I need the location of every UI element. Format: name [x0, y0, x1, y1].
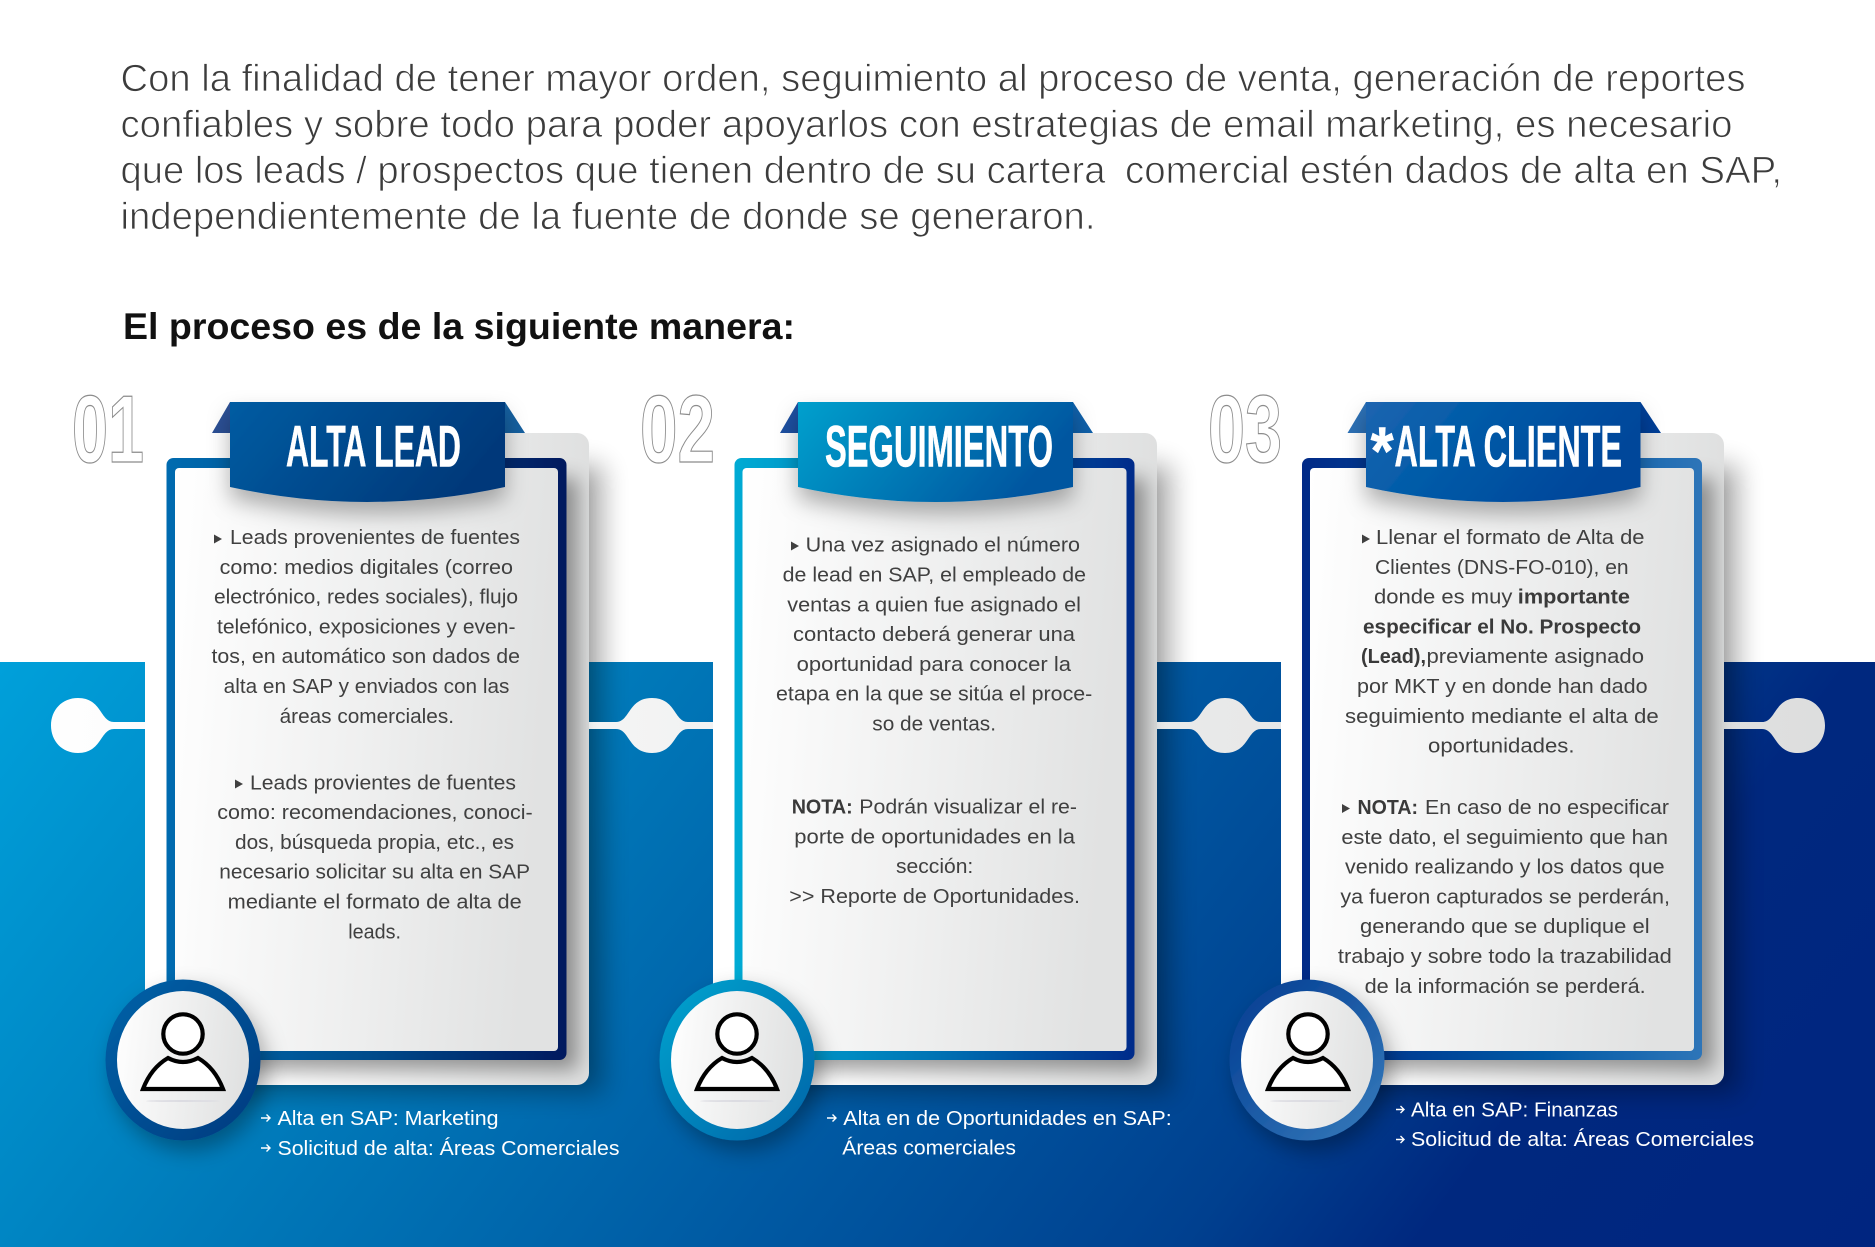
card 1 text: first paragraph: Leads provenientes de fuentes [230, 526, 520, 549]
card 3 text: note: trabajo y sobre todo la trazabilidad [1338, 945, 1672, 968]
card 2 text: note: >> Reporte de Oportunidades. [789, 885, 1080, 908]
card 3 person icon [1230, 980, 1384, 1140]
card 1: alta lead [106, 402, 620, 1160]
step number 01: 01 [72, 376, 144, 483]
card 1 text: first paragraph: alta en SAP y enviados con las [224, 675, 509, 698]
card 3 footer notes [1396, 1098, 1754, 1151]
card 3 text: first paragraph: (Lead), [1361, 645, 1426, 668]
card 2 text: note: Podrán visualizar el re- [859, 796, 1077, 818]
card 1 text: second paragraph: como: recomendaciones, conoci- [217, 801, 533, 824]
card 3 text: first paragraph: oportunidades. [1428, 735, 1574, 758]
card 2 person icon [660, 980, 814, 1140]
section heading: El proceso es de la siguiente manera: [123, 306, 795, 347]
card 2 text: first paragraph: ventas a quien fue asignado el [787, 593, 1081, 616]
card 1 text: second paragraph: mediante el formato de alta de [228, 890, 522, 914]
card 3 text: note: ya fueron capturados se perderán, [1340, 885, 1670, 908]
card 3 footer notes: Alta en SAP: Finanzas [1411, 1098, 1618, 1121]
card 2 text: note: NOTA: [792, 796, 853, 818]
card 1 text: second paragraph: Leads provientes de fuentes [250, 771, 516, 794]
card 3 ribbon: * [1371, 413, 1394, 489]
card 2 footer notes [827, 1107, 1172, 1160]
card 2 ribbon [780, 402, 1093, 502]
step number 02: 02 [640, 376, 715, 483]
card 2 text: first paragraph: oportunidad para conocer la [797, 653, 1072, 676]
card 2 frame [734, 458, 1146, 1070]
card 1 text: first paragraph: tos, en automático son dados de [212, 645, 520, 668]
card 1 text: first paragraph: electrónico, redes sociales), flujo [214, 586, 518, 609]
card 3 text: first paragraph: importante [1518, 586, 1630, 609]
card 3: alta cliente [1230, 402, 1754, 1151]
card 1 ribbon: ALTA LEAD [286, 414, 461, 480]
card 3 text: first paragraph: especificar el No. Prospecto [1363, 615, 1641, 638]
card 1 frame [166, 458, 578, 1070]
card 1 text: first paragraph: como: medios digitales (correo [220, 556, 513, 579]
blue gradient band [0, 662, 1875, 1247]
card 2 text: first paragraph: de lead en SAP, el empleado de [783, 564, 1086, 586]
intro paragraph: que los leads / prospectos que tienen dentro de su cartera [120, 150, 1106, 192]
card 1 text: second paragraph: dos, búsqueda propia, etc., es [235, 831, 514, 854]
intro paragraph: confiables y sobre todo para poder apoyarlos con estrategias de email marketing, es necesario [120, 104, 1732, 146]
card 3 footer notes: Solicitud de alta: Áreas Comerciales [1411, 1128, 1754, 1151]
card 3 text: note: generando que se duplique el [1360, 915, 1650, 938]
card 1 ribbon [212, 402, 525, 502]
card 2 inner sheet [742, 468, 1126, 1051]
card 3 text: note [1338, 796, 1672, 998]
card 2 footer notes: Alta en de Oportunidades en SAP: [843, 1107, 1172, 1130]
card 2 text: note: porte de oportunidades en la [794, 825, 1076, 848]
card 3 text: first paragraph [1345, 526, 1659, 758]
card 3 frame [1302, 458, 1714, 1070]
card 1 text: second paragraph: leads. [348, 920, 401, 943]
card 3 text: note: venido realizando y los datos que [1345, 856, 1665, 879]
step number 03: 03 [1208, 376, 1282, 483]
panel: card 1 backing [145, 433, 603, 1093]
card 1 footer notes [261, 1107, 620, 1160]
panel: card 3 backing [1281, 433, 1738, 1093]
card 3 ribbon [1348, 402, 1661, 502]
card 3 text: first paragraph: previamente asignado [1426, 645, 1644, 668]
card 1 footer notes: Alta en SAP: Marketing [278, 1107, 498, 1130]
panel: card 2 backing [713, 433, 1171, 1093]
card 2 text: first paragraph: etapa en la que se sitúa el proce- [776, 683, 1092, 706]
card 3 text: note: este dato, el seguimiento que han [1341, 826, 1668, 849]
card 3 text: first paragraph: donde es muy [1374, 586, 1513, 609]
card 2 text: first paragraph [776, 534, 1092, 736]
card 1 inner sheet [175, 468, 558, 1051]
card 1 text: second paragraph: necesario solicitar su alta en SAP [219, 861, 530, 884]
card 1 text: first paragraph: áreas comerciales. [280, 705, 454, 728]
card 1 text: first paragraph: telefónico, exposiciones y even- [217, 615, 516, 638]
card 3 text: note: de la información se perderá. [1365, 975, 1646, 998]
connector node left [51, 698, 145, 753]
intro paragraph [120, 58, 1782, 238]
card 1 footer notes: Solicitud de alta: Áreas Comerciales [278, 1137, 620, 1160]
card 3 text: first paragraph: Clientes (DNS-FO-010), en [1375, 556, 1629, 579]
card 2: seguimiento [660, 402, 1172, 1160]
card 2 text: note: sección: [896, 855, 973, 878]
card 1 text: first paragraph [212, 526, 520, 728]
intro paragraph: independientemente de la fuente de donde se generaron. [120, 196, 1096, 238]
card 3 ribbon: ALTA CLIENTE [1394, 414, 1622, 480]
card 2 text: first paragraph: so de ventas. [872, 712, 996, 736]
intro paragraph: Con la finalidad de tener mayor orden, seguimiento al proceso de venta, generación de reportes [120, 58, 1746, 100]
connector node between cards 2 and 3 [1157, 698, 1281, 753]
card 3 text: note: En caso de no especificar [1425, 796, 1669, 819]
card 3 text: note: NOTA: [1358, 796, 1418, 819]
card 2 text: note [789, 796, 1080, 908]
connector node between cards 1 and 2 [589, 698, 713, 753]
intro paragraph: comercial estén dados de alta en SAP, [1125, 150, 1782, 192]
card 2 ribbon: SEGUIMIENTO [825, 414, 1053, 480]
card 2 text: first paragraph: contacto deberá generar una [793, 623, 1076, 646]
card 1 text: second paragraph [217, 771, 533, 943]
card 2 text: first paragraph: Una vez asignado el número [806, 534, 1080, 557]
card 3 text: first paragraph: Llenar el formato de Alta de [1376, 526, 1644, 549]
card 3 text: first paragraph: por MKT y en donde han dado [1357, 675, 1648, 698]
card 3 inner sheet [1310, 468, 1694, 1051]
card 1 person icon [106, 980, 260, 1140]
card 3 text: first paragraph: seguimiento mediante el alta de [1345, 705, 1659, 728]
connector node right [1724, 698, 1825, 753]
card 2 footer notes: Áreas comerciales [842, 1137, 1016, 1160]
